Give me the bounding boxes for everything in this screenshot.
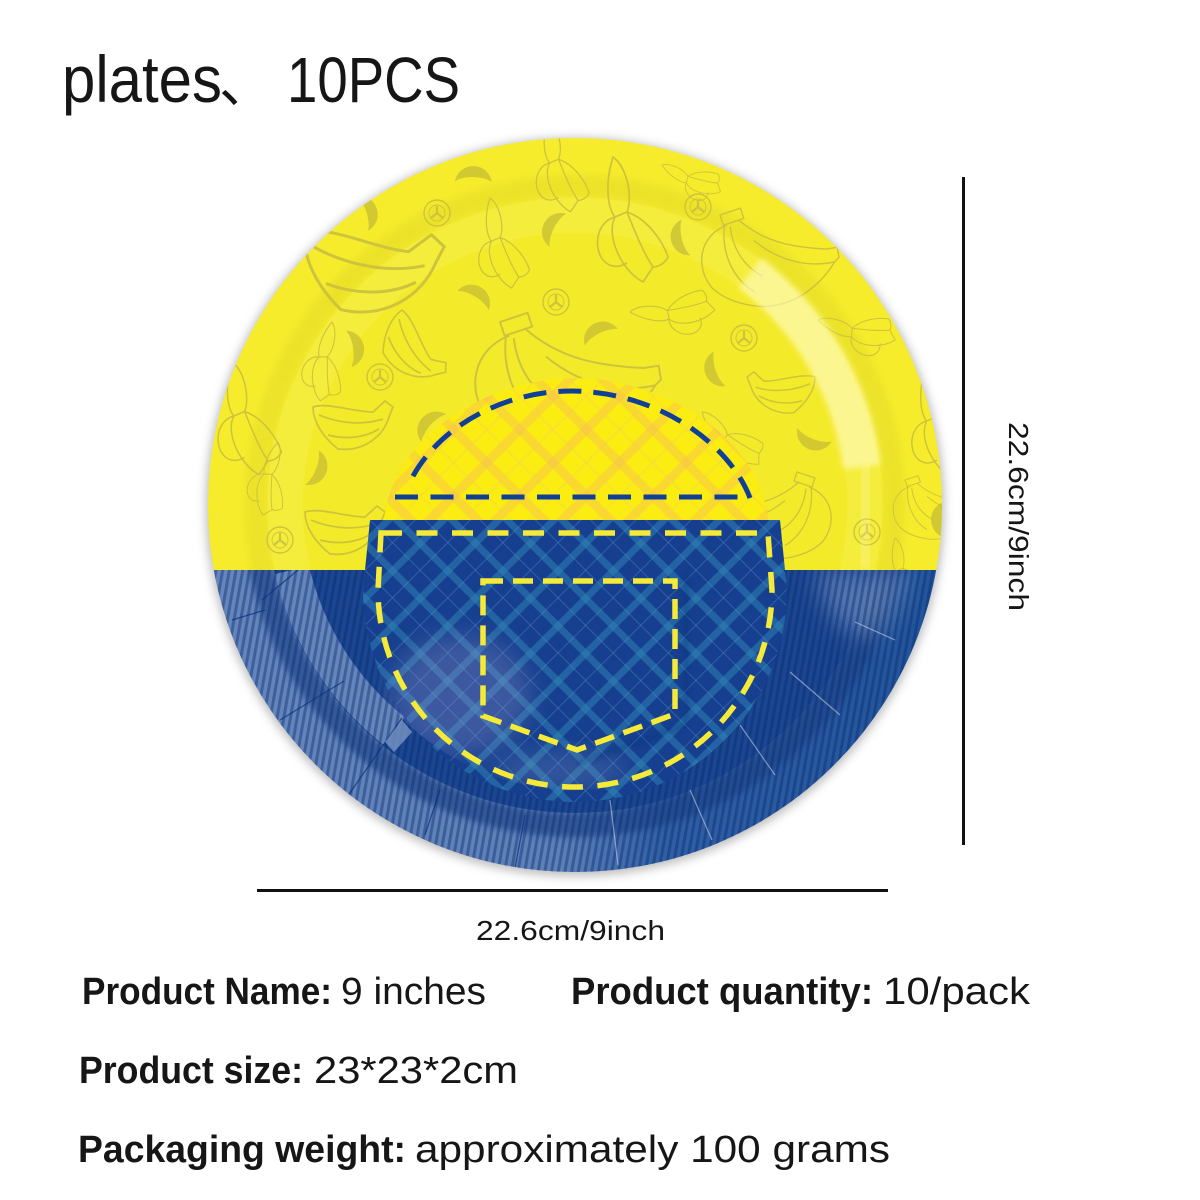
- crease glints, right: [610, 622, 895, 865]
- rim creases, left: [232, 560, 525, 868]
- banana pattern: [218, 118, 982, 607]
- horizontal dimension line: [257, 889, 888, 892]
- product size: Product size:: [79, 1050, 303, 1092]
- pocket reflection: [390, 635, 630, 788]
- title: 、: [219, 54, 273, 114]
- plate: [200, 118, 982, 880]
- rim glare, right: [815, 570, 915, 636]
- product size: 23*23*2cm: [314, 1050, 518, 1092]
- vertical dimension label: 22.6cm/9inch: [1003, 422, 1034, 611]
- plate yellow upper half: [208, 138, 942, 570]
- vertical dimension line: [962, 177, 965, 845]
- product quantity: 10/pack: [883, 971, 1031, 1013]
- infographic canvas: [66, 54, 1030, 1170]
- inner pocket stitching: [483, 581, 675, 750]
- title: 10PCS: [287, 44, 460, 116]
- yellow plaid flap: [380, 376, 772, 522]
- horizontal dimension label: 22.6cm/9inch: [476, 915, 665, 946]
- rim groove: [246, 570, 898, 840]
- packaging weight: Packaging weight:: [78, 1129, 406, 1171]
- packaging weight: approximately 100 grams: [415, 1129, 890, 1171]
- product size: [79, 1050, 518, 1092]
- weave texture: [200, 570, 950, 880]
- crumple highlight, left: [385, 720, 412, 752]
- plate well: [274, 570, 876, 813]
- inner pocket shadow edge: [577, 571, 686, 764]
- light inner band, left: [292, 570, 394, 731]
- product quantity: Product quantity:: [571, 971, 873, 1013]
- product quantity: [571, 971, 1031, 1013]
- plate blue lower half: [214, 570, 936, 872]
- flap stitching: [395, 391, 750, 498]
- product name: 9 inches: [341, 971, 486, 1013]
- product name: Product Name:: [82, 971, 332, 1013]
- product name: [82, 971, 486, 1013]
- title: [62, 42, 460, 116]
- blue plaid pocket: [360, 518, 790, 806]
- pocket stitching: [378, 533, 772, 787]
- plate drop shadow: [206, 138, 944, 876]
- packaging weight: [78, 1129, 890, 1171]
- title: plates: [62, 42, 222, 116]
- plate glare, upper right: [750, 273, 869, 568]
